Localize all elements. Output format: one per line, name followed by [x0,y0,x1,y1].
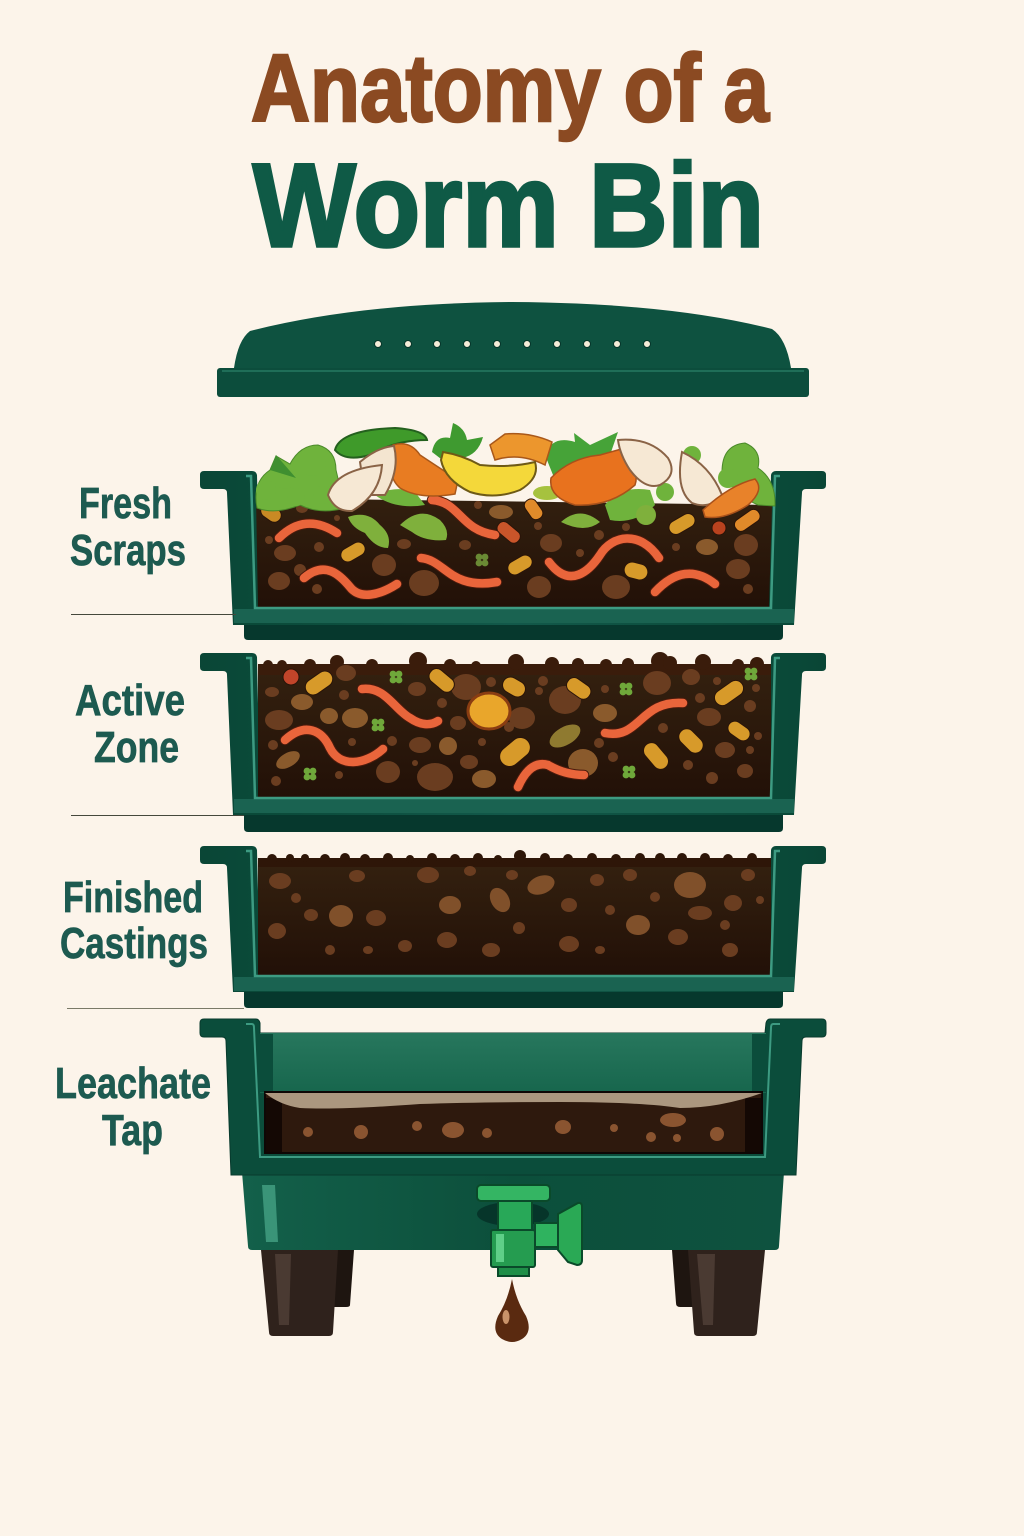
drop highlight [502,1310,510,1324]
dark corner right [745,1098,761,1152]
worms [279,500,715,595]
label: Active Zone [75,676,185,772]
front leg right [688,1250,765,1336]
base band [234,977,794,991]
back leg right [672,1250,706,1307]
label: Leachate Tap [55,1059,211,1155]
tray foot [244,813,783,832]
white chunk behind [360,446,396,495]
bin lid [217,302,809,397]
leg highlight left [275,1254,291,1325]
lid dome [234,302,791,368]
label: Leachate Tap: Tap [102,1106,163,1155]
label: Finished Castings [60,873,208,968]
title line: Worm Bin: Worm Bin [253,140,764,272]
label: Active Zone: Active [75,676,185,725]
soil top bumps [258,652,771,675]
wall highlight [246,1024,780,1157]
clovers [304,668,757,780]
wall highlight [246,658,780,798]
soil clumps [265,665,762,791]
back wall side shade right [752,1034,766,1092]
leader line 1 [71,614,236,616]
lid air holes [374,340,650,348]
tap top bar [477,1185,550,1201]
front leg left [261,1250,338,1336]
title line: Anatomy of a: Anatomy of a [251,35,770,142]
tap body highlight [496,1234,504,1262]
soil clumps [268,866,764,957]
parsley sprigs [432,423,618,480]
panel: fresh scraps tray [200,423,826,640]
label: Finished Castings: Finished [63,873,203,922]
tray body [200,1019,826,1175]
label: Fresh Scraps [70,479,186,575]
sediment specks [303,1113,724,1142]
tray foot [244,622,783,640]
green leaves [256,443,775,548]
yellow fruit [441,452,536,496]
leg highlight right [697,1254,715,1325]
curved green vegetable [335,428,427,458]
worms [285,689,683,787]
tray body [200,653,826,815]
label: Active Zone: Zone [94,723,179,772]
big orange chunk [551,448,636,505]
food bits [258,497,762,582]
lid flange highlight [222,370,804,372]
leader line 3 [67,1008,244,1010]
leader line 2 [71,814,244,816]
orange chunk left [390,444,458,496]
label: Fresh Scraps: Scraps [70,526,186,575]
liquid surface layer [265,1093,762,1108]
lower reservoir box [242,1172,784,1250]
lid flange [217,368,809,397]
tap stem [498,1200,532,1230]
soil [256,498,772,608]
base band [234,609,794,623]
tap [477,1185,582,1276]
carrot [703,479,759,518]
decaying orange [468,693,510,729]
tap side pipe [535,1223,558,1247]
back wall side shade left [260,1034,273,1092]
tap body [491,1230,535,1267]
tray body [200,846,826,992]
leachate drop [495,1279,529,1342]
label: Leachate Tap: Leachate [55,1059,211,1108]
base band [234,799,794,813]
title [251,35,770,272]
back leg left [320,1250,354,1307]
white chunk right [618,440,672,486]
buried leaf [476,554,488,566]
tap mounting shadow [477,1202,549,1226]
inner back wall [260,1033,766,1093]
food bits [283,666,753,773]
box highlight stripe [262,1185,278,1242]
wall highlight [246,476,780,608]
panel: leachate tap tray [200,1019,826,1342]
tray body [200,471,826,625]
orange slice behind [490,434,552,465]
label: Fresh Scraps: Fresh [79,479,172,528]
white chunk front [328,465,382,511]
soil [258,673,771,799]
tray foot [244,990,783,1008]
wall highlight [246,851,780,976]
panel: finished castings tray [200,846,826,1008]
tap nozzle [498,1267,529,1276]
soil top bumps [258,850,771,867]
soil clumps [265,501,758,599]
white chunk far right [680,452,722,505]
panel: active zone tray [200,652,826,832]
leachate liquid [265,1092,762,1153]
label: Finished Castings: Castings [60,919,208,968]
soil [258,866,771,975]
dark corner left [266,1098,282,1152]
tap handle [558,1203,582,1265]
